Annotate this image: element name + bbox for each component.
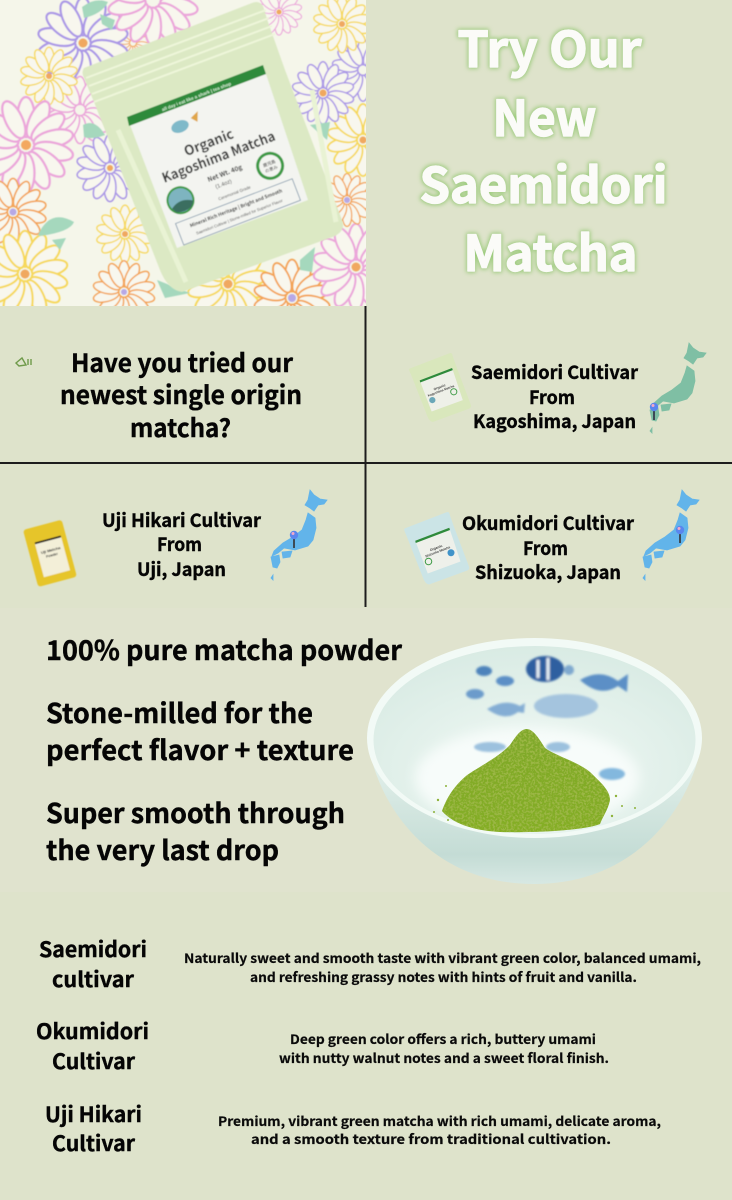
icon: Uji pouch: Uji Matcha bbox=[40, 545, 62, 555]
Okumidori origin text: From bbox=[523, 535, 568, 561]
row: Saemidori: Naturally sweet and smooth taste with vibrant green color, balanced umami, bbox=[184, 948, 701, 967]
pouch label backing bbox=[127, 65, 308, 248]
title: Saemidori bbox=[420, 147, 668, 218]
map: Japan with Shizuoka pin bbox=[643, 490, 699, 580]
Uji origin text: Uji Hikari Cultivar bbox=[102, 507, 262, 533]
pouch label content: Organic bbox=[181, 123, 236, 160]
grid dividers bbox=[0, 306, 732, 607]
pouch zip ridges bbox=[86, 10, 275, 102]
row: Okumidori: Deep green color offers a rich, buttery umami bbox=[290, 1029, 596, 1048]
icon: Okumidori pouch: Shizuoka Matcha bbox=[425, 545, 451, 558]
row: Okumidori: with nutty walnut notes and a sweet floral finish. bbox=[279, 1048, 609, 1067]
question heading: newest single origin bbox=[60, 376, 302, 412]
pouch label content: Kagoshima Matcha bbox=[158, 125, 278, 187]
title: Matcha bbox=[464, 215, 638, 286]
row: Uji Hikari: Uji Hikari bbox=[45, 1099, 142, 1129]
pouch label content: (1.4oz) bbox=[215, 179, 233, 191]
row: Uji Hikari: and a smooth texture from traditional cultivation. bbox=[251, 1129, 611, 1148]
panel: product photo bbox=[0, 0, 366, 306]
pouch body bbox=[82, 2, 343, 292]
row: Saemidori: and refreshing grassy notes with hints of fruit and vanilla. bbox=[250, 967, 637, 986]
matcha powder mound bbox=[442, 729, 610, 832]
pouch label content: の恵み bbox=[264, 163, 279, 175]
Okumidori origin text: Okumidori Cultivar bbox=[462, 510, 635, 536]
question heading: Have you tried our bbox=[71, 344, 293, 380]
image: bowl of matcha powder bbox=[367, 638, 702, 884]
feature list bbox=[46, 629, 402, 868]
pouch highlight bbox=[118, 90, 336, 282]
icon: Saemidori pouch: Kagoshima Matcha bbox=[427, 384, 455, 398]
panel: newest matcha question bbox=[16, 344, 302, 445]
feature list: perfect flavor + texture bbox=[46, 729, 354, 768]
row: Saemidori: cultivar bbox=[52, 964, 135, 994]
pouch label content: all day i eat like a shark | tea shop bbox=[161, 81, 232, 112]
pouch label content: 鹿児島 bbox=[262, 158, 277, 169]
row: Saemidori: Saemidori bbox=[39, 934, 147, 964]
icon: matcha pouch bbox=[82, 2, 343, 292]
row: Okumidori bbox=[36, 1016, 609, 1076]
Saemidori origin text: From bbox=[529, 384, 575, 410]
feature list: 100% pure matcha powder bbox=[46, 629, 402, 668]
row: Saemidori bbox=[39, 934, 701, 994]
bowl interior bbox=[374, 646, 696, 834]
Saemidori origin text: Saemidori Cultivar bbox=[471, 359, 639, 385]
pouch label content: Mineral Rich Heritage | Bright and Smooth bbox=[189, 187, 283, 229]
bowl rim bbox=[367, 638, 702, 838]
bowl body bbox=[368, 738, 702, 884]
feature section background bbox=[0, 608, 732, 892]
cultivar comparison table bbox=[36, 934, 701, 1158]
pouch label content: Saemidori Cultivar | Stone-milled for Superior Flavor bbox=[195, 198, 284, 236]
title bbox=[420, 11, 668, 286]
flower pattern bbox=[0, 0, 366, 306]
Okumidori origin text bbox=[462, 510, 635, 585]
question heading: matcha? bbox=[130, 409, 231, 445]
pouch label content bbox=[161, 82, 302, 246]
map: Japan with Uji pin bbox=[271, 490, 327, 580]
Uji origin text: Uji, Japan bbox=[137, 556, 226, 582]
map: Japan with Kagoshima pin bbox=[650, 343, 706, 433]
row: Uji Hikari bbox=[45, 1099, 661, 1158]
matcha powder specks bbox=[433, 785, 636, 821]
title: New bbox=[492, 80, 596, 151]
row: Uji Hikari: Cultivar bbox=[52, 1128, 136, 1158]
Uji origin text bbox=[102, 507, 262, 582]
Uji origin text: From bbox=[157, 531, 202, 557]
icon: tiny logo bbox=[16, 358, 31, 366]
panel: Uji Hikari cultivar bbox=[23, 490, 327, 587]
photo backdrop fabric bbox=[0, 0, 366, 306]
fish pattern bbox=[466, 656, 628, 780]
bowl well bbox=[415, 728, 639, 828]
feature list: Stone-milled for the bbox=[46, 692, 313, 731]
Okumidori origin text: Shizuoka, Japan bbox=[475, 559, 621, 585]
icon: Okumidori pouch: Organic bbox=[429, 544, 443, 552]
icon: Uji pouch bbox=[23, 520, 77, 587]
row: Uji Hikari: Premium, vibrant green matcha with rich umami, delicate aroma, bbox=[218, 1111, 661, 1130]
icon: Okumidori pouch bbox=[404, 512, 469, 584]
row: Okumidori: Okumidori bbox=[36, 1016, 149, 1046]
panel: Saemidori cultivar bbox=[409, 343, 706, 434]
pouch label band bbox=[127, 65, 266, 126]
row: Okumidori: Cultivar bbox=[52, 1046, 136, 1076]
question heading bbox=[60, 344, 302, 445]
icon: Saemidori pouch: Organic bbox=[433, 383, 446, 391]
pouch label content: Net Wt. 40g bbox=[206, 161, 243, 184]
title: Try Our bbox=[458, 11, 642, 82]
Saemidori origin text: Kagoshima, Japan bbox=[473, 408, 636, 434]
icon: Uji pouch: Powder bbox=[46, 552, 59, 559]
Saemidori origin text bbox=[471, 359, 639, 434]
icon: Saemidori pouch bbox=[409, 353, 471, 422]
feature list: the very last drop bbox=[46, 829, 279, 868]
pouch label content: Ceremonial Grade bbox=[218, 184, 252, 201]
feature list: Super smooth through bbox=[46, 792, 345, 831]
panel: Okumidori cultivar bbox=[404, 490, 699, 585]
